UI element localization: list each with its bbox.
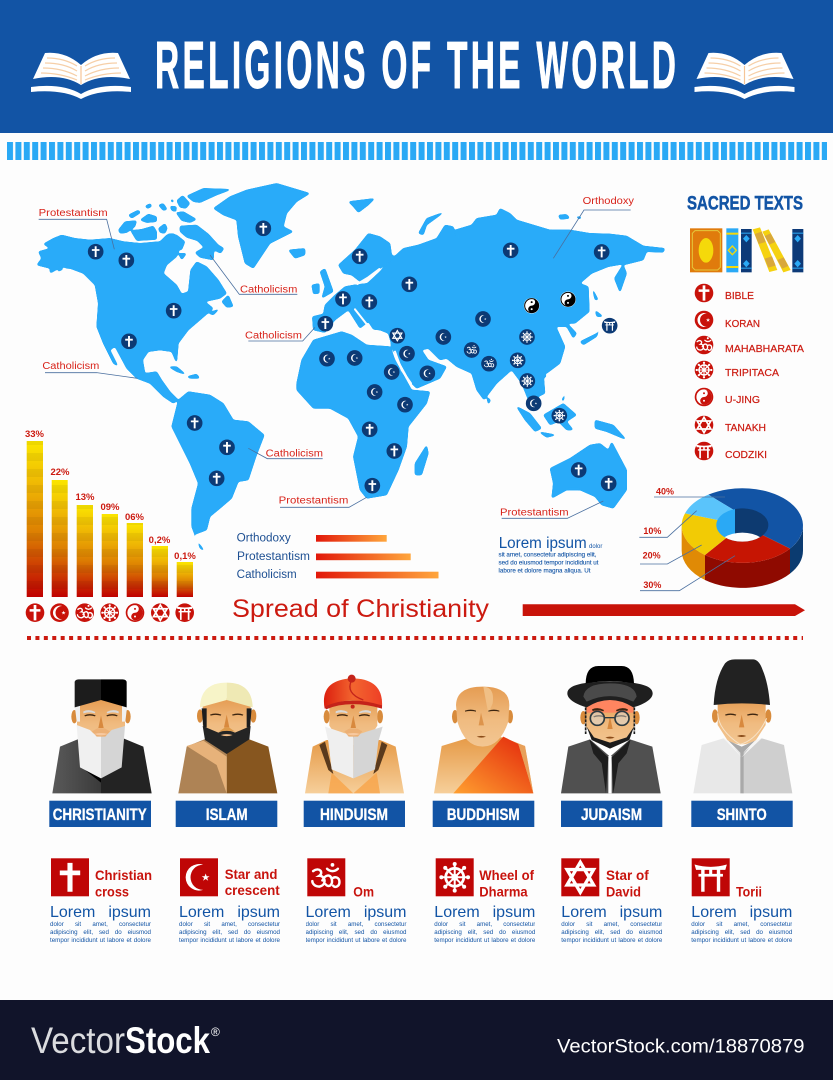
- text block: lorem ipsum: labore et dolore magna aliqua. Ut: [498, 568, 591, 574]
- text block: christian cross description: tempor incididunt ut labore et dolore: [50, 937, 151, 944]
- symbol: star of david: [561, 858, 649, 900]
- chart: christian denominations: Catholicism: [237, 569, 297, 581]
- symbol: wheel of dharma: Dharma: [479, 884, 528, 900]
- text block: star and crescent description: tempor incididunt ut labore et dolore: [179, 937, 280, 944]
- text block: torii description: [691, 904, 792, 944]
- legend: Tanakh: [695, 416, 766, 434]
- text block: wheel of dharma description: dolor sit amet, consectetur: [434, 921, 535, 928]
- bar chart: religion shares: 13%: [75, 492, 95, 503]
- symbol: wheel of dharma: [436, 858, 534, 900]
- bar chart icons: [26, 603, 194, 622]
- legend: Codziki: CODZIKI: [725, 449, 767, 461]
- bar chart: religion shares: 33%: [25, 429, 45, 440]
- map callouts: west: Protestantism: [279, 495, 348, 506]
- text block: torii description: tempor incididunt ut labore et dolore: [691, 937, 792, 944]
- text block: christian cross description: adipiscing elit, sed do eiusmod: [50, 929, 151, 936]
- map markers: Americas: [88, 220, 271, 486]
- label: islam: [176, 801, 277, 827]
- text block: star of david description: Lorem ipsum: [561, 904, 662, 921]
- chart: christian denominations: Protestantism: [237, 551, 310, 563]
- bar chart: religion shares: 0,1%: [174, 551, 196, 562]
- heading: spread of christianity: Spread of Christianity: [232, 595, 490, 623]
- map callouts: west: Protestantism: [39, 208, 108, 219]
- label: islam: ISLAM: [206, 806, 248, 824]
- figure: jewish man: [561, 666, 661, 793]
- header banner: [0, 0, 833, 133]
- map callouts: west: Catholicism: [42, 361, 99, 372]
- figure: muslim man: [178, 683, 277, 793]
- text block: torii description: dolor sit amet, consectetur: [691, 921, 792, 928]
- label: christianity: CHRISTIANITY: [53, 806, 147, 824]
- icon: open book right: [694, 53, 794, 99]
- bar chart: religion shares: 0,2%: [149, 535, 171, 546]
- label: buddhism: BUDDHISM: [447, 806, 520, 824]
- legend: Bible: BIBLE: [725, 290, 754, 302]
- symbol: torii: Torii: [736, 884, 762, 900]
- icon: row of books: [690, 227, 803, 272]
- label: hinduism: HINDUISM: [320, 806, 388, 824]
- footer logo: [31, 1020, 220, 1061]
- text block: wheel of dharma description: tempor incididunt ut labore et dolore: [434, 937, 535, 944]
- text block: christian cross description: Lorem ipsum: [50, 904, 151, 921]
- text block: om description: Lorem ipsum: [306, 904, 406, 921]
- figure: shinto priest: [693, 659, 792, 793]
- legend: Codziki: [695, 442, 767, 461]
- map callouts: east: Orthodoxy: [583, 196, 634, 207]
- text block: lorem ipsum: Lorem ipsum: [499, 535, 587, 552]
- label: buddhism: [433, 801, 534, 827]
- symbol: star of david: David: [606, 884, 641, 900]
- text block: lorem ipsum: dolor: [589, 544, 602, 550]
- legend: Mahabharata: [695, 336, 804, 355]
- label: hinduism: [304, 801, 405, 827]
- legend: Tripitaca: TRIPITACA: [725, 367, 779, 379]
- label: judaism: [561, 801, 662, 827]
- map: land masses: [32, 183, 665, 552]
- 3d donut chart: 30%: [643, 580, 661, 590]
- text block: lorem ipsum: sed do eiusmod tempor incididunt ut: [498, 560, 599, 566]
- symbol: star and crescent: [180, 858, 280, 898]
- legend: Koran: [695, 311, 760, 330]
- bar chart: religion shares: 06%: [125, 512, 145, 523]
- label: christianity: [49, 801, 151, 827]
- text block: om description: adipiscing elit, sed do eiusmod: [306, 929, 406, 936]
- text block: christian cross description: dolor sit amet, consectetur: [50, 921, 151, 928]
- text block: lorem ipsum: [498, 535, 602, 574]
- text block: christian cross description: [50, 904, 151, 944]
- chart: christian denominations: [237, 532, 438, 581]
- map callouts: east: [500, 196, 634, 518]
- symbol: christian cross: cross: [95, 884, 129, 900]
- legend: Bible: [695, 284, 754, 302]
- 3d donut chart: 10%: [643, 526, 661, 536]
- text block: lorem ipsum: sit amet, consectetur adipiscing elit,: [498, 552, 597, 558]
- red dotted divider: [27, 636, 803, 640]
- symbol: torii: [692, 858, 762, 900]
- text block: wheel of dharma description: adipiscing elit, sed do eiusmod: [434, 929, 535, 936]
- text block: star of david description: dolor sit amet, consectetur: [561, 921, 662, 928]
- map: inland seas: [355, 269, 411, 383]
- legend: Tanakh: TANAKH: [725, 422, 766, 434]
- footer logo: Stock: [125, 1020, 210, 1061]
- map callouts: west: [39, 208, 367, 507]
- bar chart: religion shares: [25, 429, 196, 622]
- chart: christian denominations: Orthodoxy: [237, 532, 291, 544]
- legend: Tripitaca: [695, 361, 779, 379]
- map callouts: west: Catholicism: [240, 285, 297, 296]
- arrow: [523, 604, 805, 616]
- symbol: star and crescent: Star and: [225, 866, 277, 882]
- 3d donut chart: [639, 487, 803, 591]
- title: RELIGIONS OF THE WORLD: [155, 29, 676, 103]
- legend: U-Jing: [695, 388, 760, 406]
- bar chart: religion shares: 22%: [50, 467, 70, 478]
- label: shinto: SHINTO: [717, 806, 767, 824]
- text block: om description: tempor incididunt ut labore et dolore: [306, 937, 406, 944]
- legend: U-Jing: U-JING: [725, 394, 760, 406]
- legend: Mahabharata: MAHABHARATA: [725, 343, 804, 355]
- text block: star of david description: tempor incididunt ut labore et dolore: [561, 937, 662, 944]
- bar chart: religion shares: 09%: [100, 502, 120, 513]
- text block: wheel of dharma description: [434, 904, 535, 944]
- symbol: star and crescent: crescent: [225, 882, 280, 898]
- text block: om description: dolor sit amet, consectetur: [306, 921, 406, 928]
- text block: torii description: adipiscing elit, sed do eiusmod: [691, 929, 792, 936]
- label: shinto: [691, 801, 793, 827]
- text block: star and crescent description: dolor sit amet, consectetur: [179, 921, 280, 928]
- symbol: wheel of dharma: Wheel of: [479, 867, 534, 883]
- legend: Koran: KORAN: [725, 318, 760, 330]
- text block: torii description: Lorem ipsum: [691, 904, 792, 921]
- symbol: om: [307, 858, 374, 900]
- symbol: star of david: Star of: [606, 867, 649, 883]
- panel: sacred texts: [687, 192, 804, 461]
- icon: open book left: [31, 53, 131, 99]
- map markers: old world: [317, 242, 617, 493]
- figure: buddhist monk: [434, 687, 533, 793]
- figure: hindu holy man: [305, 675, 404, 793]
- symbol: om: Om: [353, 884, 374, 900]
- map callouts: east: Protestantism: [500, 507, 569, 518]
- text block: star and crescent description: adipiscing elit, sed do eiusmod: [179, 929, 280, 936]
- text block: wheel of dharma description: Lorem ipsum: [434, 904, 535, 921]
- figure: christian priest: [52, 679, 152, 793]
- blue striped band: [7, 142, 827, 160]
- footer logo: Vector: [31, 1020, 125, 1061]
- text block: star of david description: [561, 904, 662, 944]
- map callouts: west: Catholicism: [245, 330, 302, 341]
- text block: star and crescent description: [179, 904, 280, 944]
- text block: star of david description: adipiscing elit, sed do eiusmod: [561, 929, 662, 936]
- world map: [32, 183, 665, 552]
- footer bar: [0, 1000, 833, 1080]
- text block: om description: [306, 904, 406, 944]
- symbol: christian cross: [51, 858, 152, 900]
- text block: star and crescent description: Lorem ipsum: [179, 904, 280, 921]
- symbol: christian cross: Christian: [95, 867, 152, 883]
- 3d donut chart: 20%: [643, 551, 661, 561]
- footer image id: VectorStock.com/18870879: [557, 1036, 804, 1058]
- label: judaism: JUDAISM: [581, 806, 642, 824]
- map callouts: west: Catholicism: [266, 449, 323, 460]
- footer logo: ®: [211, 1025, 220, 1039]
- 3d donut chart: 40%: [656, 487, 674, 497]
